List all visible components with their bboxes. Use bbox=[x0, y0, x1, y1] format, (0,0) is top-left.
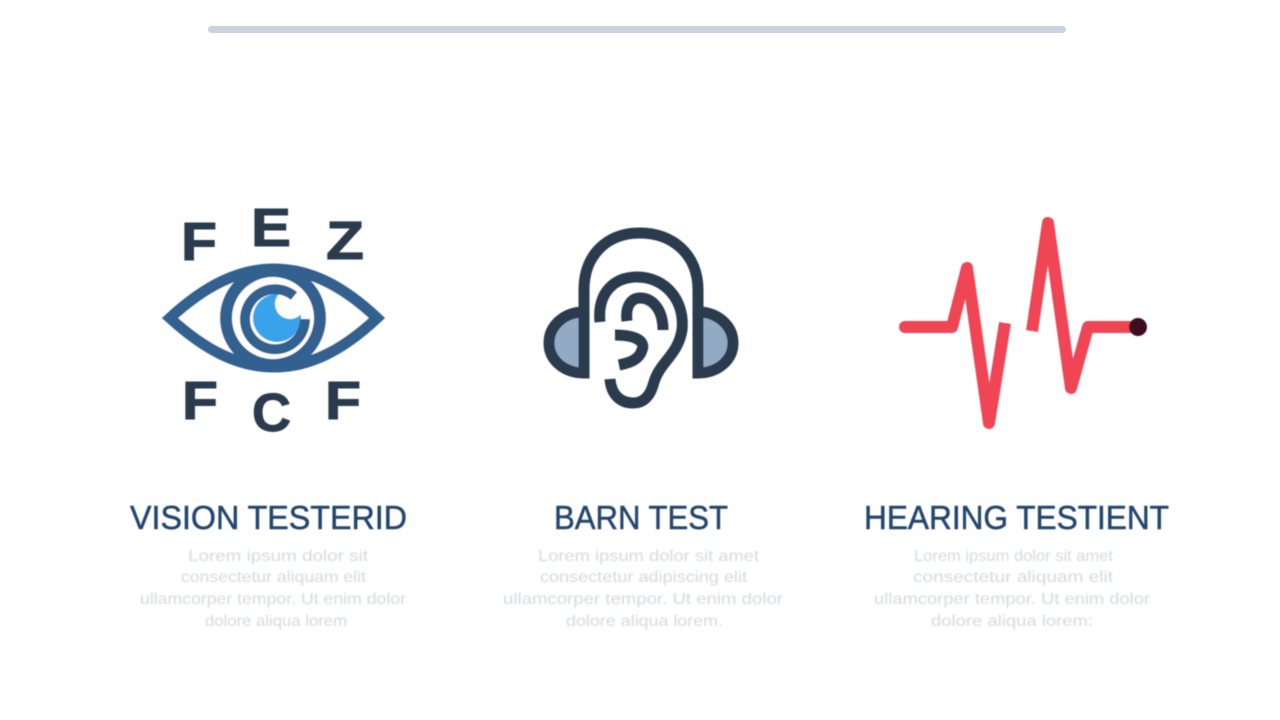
text block: ear description: dolore aliqua lorem. bbox=[566, 613, 723, 630]
inner ear bbox=[627, 298, 663, 330]
panel: ear test bbox=[503, 233, 784, 630]
eye outline bbox=[170, 269, 377, 367]
right ear cup bbox=[698, 312, 733, 373]
heading: vision test: VISION TESTERID bbox=[130, 499, 407, 536]
pupil highlight bbox=[275, 289, 305, 319]
end dot bbox=[1129, 318, 1147, 336]
text block: ear description: consectetur adipiscing elit bbox=[540, 569, 748, 586]
pulse line start cap bbox=[899, 321, 911, 333]
text block: hearing description bbox=[874, 548, 1151, 630]
panel: vision test bbox=[130, 198, 407, 630]
eye chart letters: F bbox=[325, 371, 361, 431]
heading: ear test: BARN TEST bbox=[554, 499, 728, 536]
text block: ear description bbox=[503, 548, 784, 630]
icon: ear with headphones bbox=[549, 233, 733, 403]
pulse line left bbox=[905, 268, 1005, 423]
text block: vision description: Lorem ipsum dolor sit bbox=[188, 548, 369, 565]
text block: hearing description: consectetur aliquam elit bbox=[913, 569, 1114, 586]
eye chart letters: Z bbox=[326, 211, 364, 271]
text block: ear description: ullamcorper tempor. Ut enim dolor bbox=[503, 591, 784, 608]
text block: vision description bbox=[140, 548, 407, 630]
headband bbox=[584, 233, 698, 375]
inner C ring bbox=[245, 289, 305, 349]
text block: hearing description: Lorem ipsum dolor sit amet bbox=[914, 548, 1114, 565]
heading: hearing test: HEARING TESTIENT bbox=[864, 499, 1169, 536]
icon: pulse waveform bbox=[899, 223, 1147, 423]
text block: vision description: consectetur aliquam elit bbox=[181, 569, 367, 586]
text block: vision description: dolore aliqua lorem bbox=[205, 613, 347, 630]
eye chart letters: F bbox=[181, 212, 217, 272]
text block: hearing description: dolore aliqua lorem: bbox=[931, 613, 1093, 630]
outer ear bbox=[600, 277, 682, 403]
pulse line right bbox=[1032, 223, 1136, 388]
eye chart letters: C bbox=[252, 383, 291, 443]
pupil bbox=[253, 294, 301, 342]
top divider bar bbox=[208, 26, 1066, 33]
eye chart letters: E bbox=[251, 198, 291, 258]
eye chart letters: F bbox=[182, 371, 218, 431]
eye chart letters bbox=[181, 198, 364, 443]
text block: hearing description: ullamcorper tempor. Ut enim dolor bbox=[874, 591, 1151, 608]
text block: vision description: ullamcorper tempor. Ut enim dolor bbox=[140, 591, 407, 608]
icon: eye chart with eye bbox=[170, 198, 377, 443]
iris ring bbox=[226, 271, 320, 365]
antihelix bbox=[615, 335, 643, 365]
left ear cup bbox=[549, 312, 584, 373]
panel: hearing test bbox=[864, 223, 1169, 630]
text block: ear description: Lorem ipsum dolor sit amet bbox=[538, 548, 760, 565]
